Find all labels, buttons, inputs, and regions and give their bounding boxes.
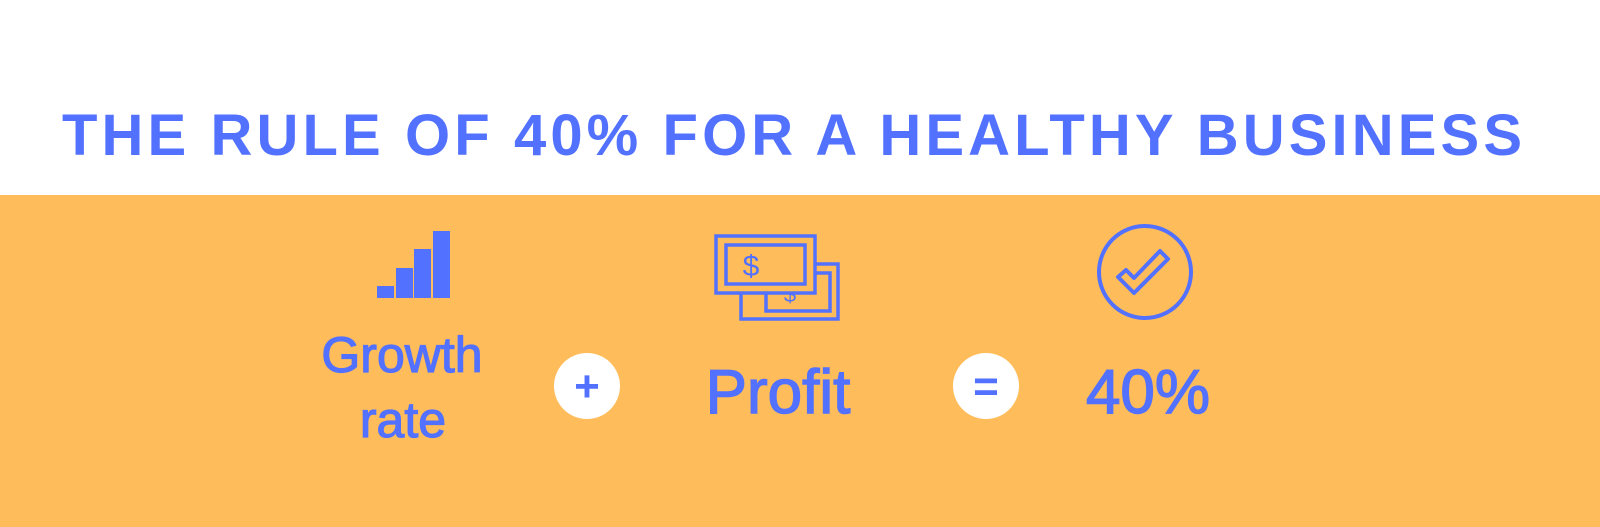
equals circle: = bbox=[973, 362, 999, 411]
icon: check circle bbox=[1099, 226, 1191, 318]
plus circle: + bbox=[574, 362, 600, 411]
plus circle bbox=[554, 353, 620, 419]
icon: money bills: $ bbox=[784, 282, 796, 307]
icon: money bills bbox=[716, 236, 838, 319]
text: growth rate: Growth bbox=[321, 327, 483, 383]
text: profit: Profit bbox=[706, 358, 850, 427]
icon: bar chart bbox=[377, 231, 450, 298]
text: growth rate bbox=[321, 327, 483, 448]
text: growth rate: rate bbox=[360, 392, 446, 448]
title: THE RULE OF 40% FOR A HEALTHY BUSINESS bbox=[62, 103, 1522, 168]
icon: money bills: $ bbox=[743, 250, 760, 283]
equals circle bbox=[953, 353, 1019, 419]
panel: orange band bbox=[0, 195, 1600, 527]
text: 40%: 40% bbox=[1086, 358, 1210, 427]
